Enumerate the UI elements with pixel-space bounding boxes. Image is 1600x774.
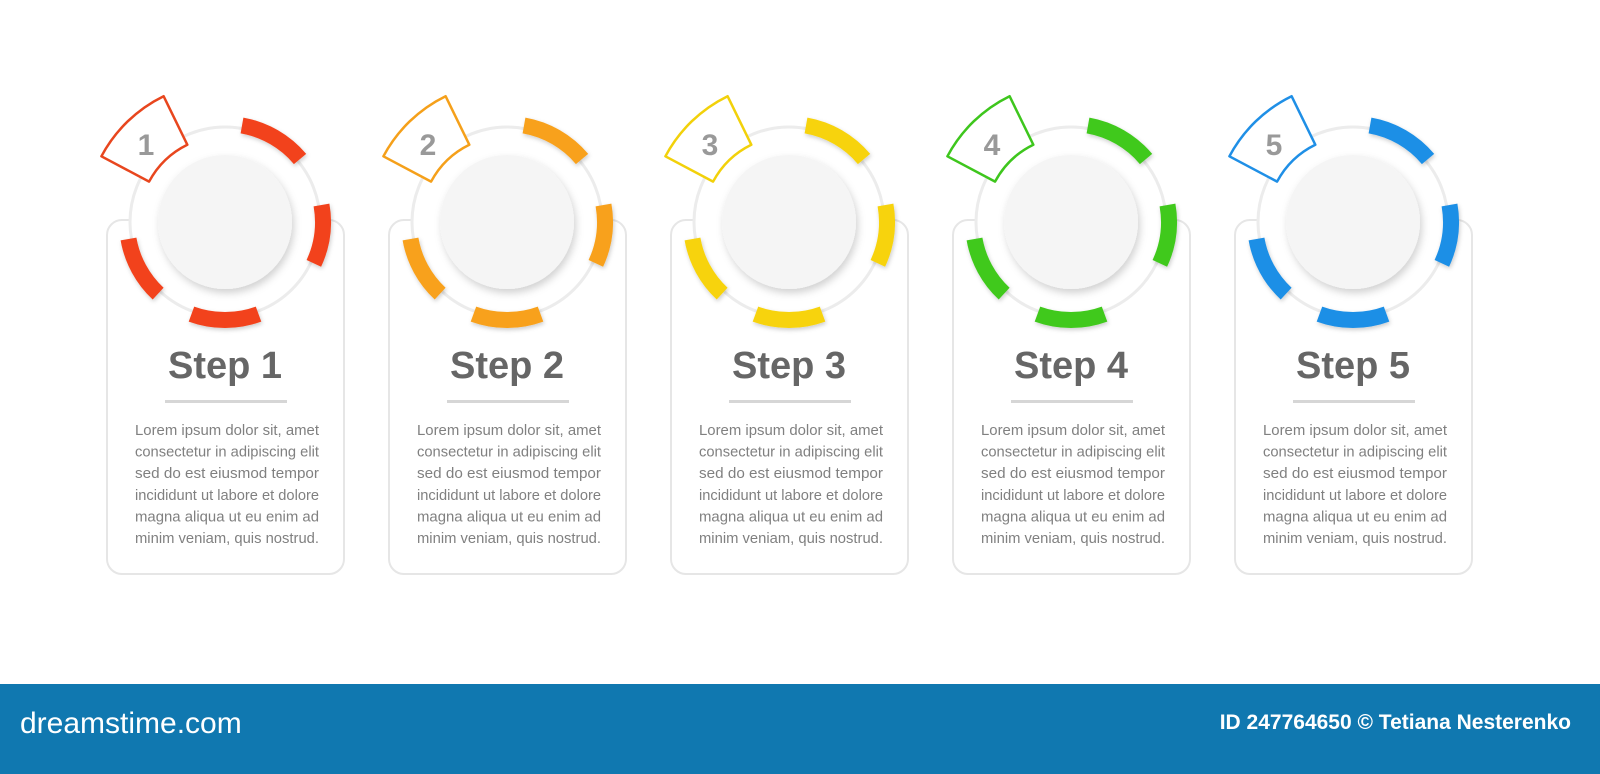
step 3 badge: 3 [702, 129, 718, 162]
step 4 [947, 96, 1190, 574]
step 1 text [135, 423, 319, 547]
footer bar [0, 684, 1600, 774]
step 2 badge [383, 96, 469, 182]
step 5 segments [1249, 118, 1459, 328]
step 4 segments [967, 118, 1177, 328]
step 4 badge: 4 [984, 129, 1001, 162]
step 1 heading: Step 1 [168, 345, 282, 387]
step 2 heading: Step 2 [450, 345, 564, 387]
footer credit: ID 247764650 © Tetiana Nesterenko [1220, 711, 1571, 734]
step 4 badge [947, 96, 1033, 182]
step 5 badge [1229, 96, 1315, 182]
step 1 [101, 96, 344, 574]
step 4 text [981, 423, 1165, 547]
step 3 [665, 96, 908, 574]
step 3 segments [685, 118, 895, 328]
step 5 heading: Step 5 [1296, 345, 1410, 387]
step 4 heading: Step 4 [1014, 345, 1128, 387]
step 1 badge: 1 [138, 129, 154, 162]
step 5 [1229, 96, 1472, 574]
step 3 text [699, 423, 883, 547]
step 5 badge: 5 [1266, 129, 1282, 162]
step 2 [383, 96, 626, 574]
step 2 text [417, 423, 601, 547]
step 2 badge: 2 [420, 129, 436, 162]
step 1 segments [121, 118, 331, 328]
step 2 segments [403, 118, 613, 328]
step 5 text [1263, 423, 1447, 547]
step 3 heading: Step 3 [732, 345, 846, 387]
step 1 badge [101, 96, 187, 182]
step 3 badge [665, 96, 751, 182]
footer logo: dreamstime.com [20, 707, 242, 740]
